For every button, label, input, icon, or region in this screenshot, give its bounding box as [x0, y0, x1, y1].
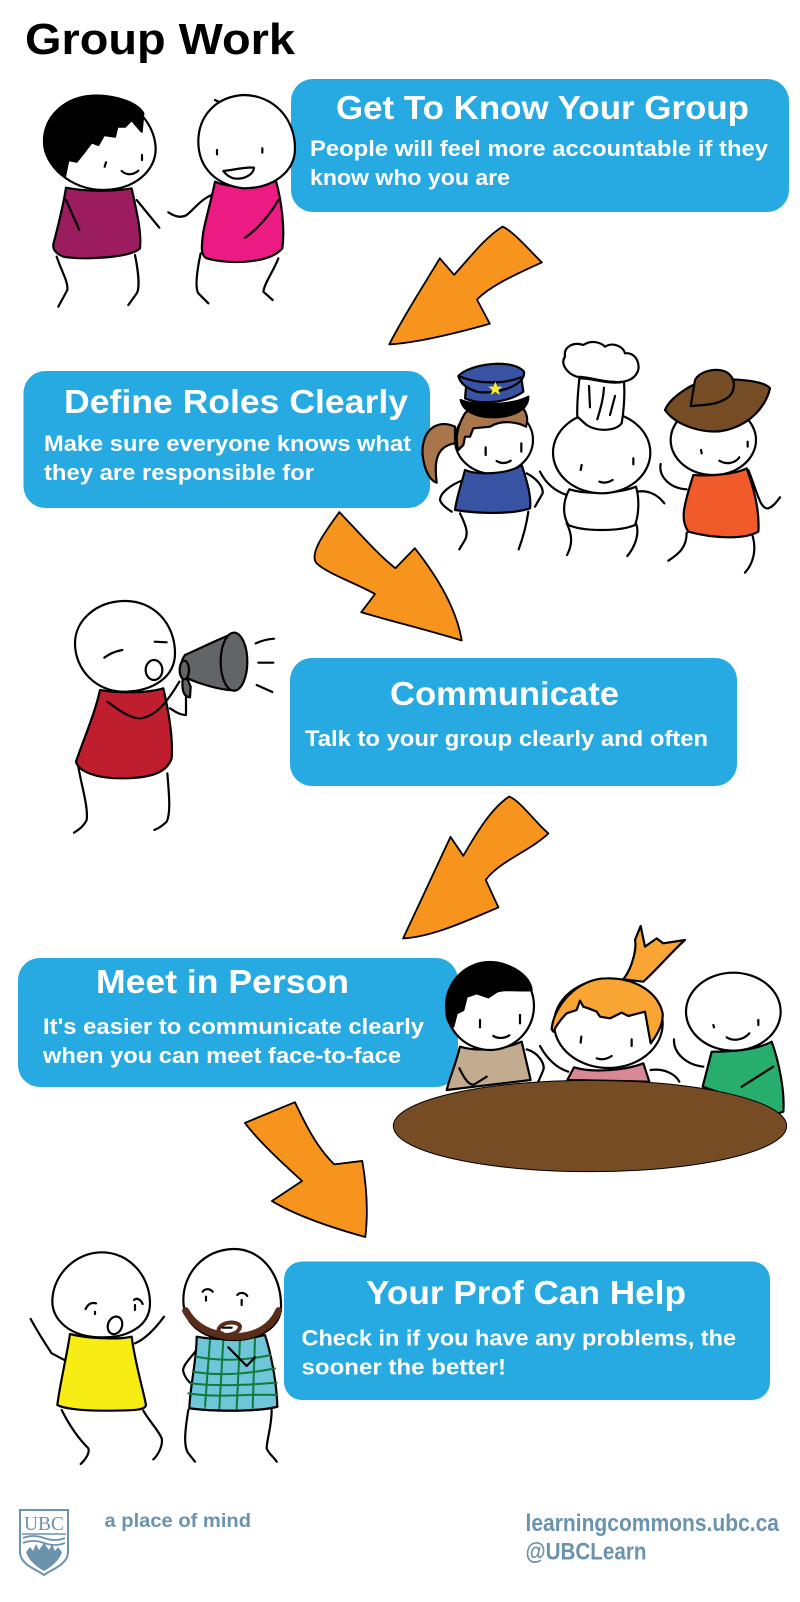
heading: Meet in Person: [96, 963, 349, 1000]
illustration: student and bearded professor: [31, 1249, 281, 1464]
illustration: person with megaphone: [74, 601, 274, 833]
person with black hair: [446, 962, 544, 1090]
body text: Talk to your group clearly and often: [305, 726, 708, 751]
table: [393, 1080, 787, 1172]
body text: [44, 431, 412, 485]
panel: get to know your group: [291, 79, 789, 212]
illustration: three people at a table: [393, 926, 787, 1172]
body text: [310, 136, 769, 190]
arrow: down-right to communicate: [314, 512, 462, 641]
panel: define roles clearly: [24, 371, 430, 508]
illustration: two people talking: [44, 95, 295, 307]
person in pink talking: [168, 95, 295, 303]
panel: meet in person: [18, 958, 458, 1087]
logo: UBC shield: UBC: [24, 1513, 64, 1535]
panel: communicate: [290, 658, 737, 786]
heading: Your Prof Can Help: [366, 1274, 686, 1311]
cowboy: [660, 370, 780, 573]
arrow: down-right to your prof can help: [245, 1102, 367, 1237]
body text: Make sure everyone knows what: [44, 431, 412, 456]
arrow: down-left to meet in person: [403, 797, 548, 938]
body text: [302, 1326, 736, 1380]
heading: Define Roles Clearly: [64, 383, 409, 420]
chef: [540, 342, 664, 556]
heading: Get To Know Your Group: [336, 89, 749, 126]
body text: they are responsible for: [44, 460, 314, 485]
illustration: police officer, chef and cowboy: [422, 342, 780, 573]
body text: sooner the better!: [302, 1354, 506, 1380]
police officer: [422, 364, 543, 549]
title: Group Work: [25, 15, 296, 64]
person in green: [674, 973, 784, 1113]
arrow: down-left to define roles: [389, 227, 542, 344]
person in purple with black hair: [44, 96, 159, 307]
tagline: a place of mind: [104, 1511, 251, 1532]
student in yellow: [31, 1252, 164, 1464]
body text: know who you are: [310, 165, 510, 190]
body text: People will feel more accountable if they: [310, 136, 769, 161]
body text: [42, 1014, 425, 1068]
heading: Communicate: [390, 675, 619, 712]
person with orange hair: [540, 926, 685, 1082]
logo: UBC shield: [20, 1510, 68, 1575]
website and social handle: [526, 1510, 780, 1566]
website and social handle: @UBCLearn: [526, 1538, 646, 1566]
body text: when you can meet face-to-face: [42, 1043, 401, 1068]
panel: your prof can help: [284, 1262, 770, 1400]
body text: Check in if you have any problems, the: [302, 1326, 736, 1350]
body text: It's easier to communicate clearly: [43, 1014, 425, 1039]
professor with beard and plaid shirt: [183, 1249, 281, 1462]
icon: megaphone: [180, 633, 274, 697]
